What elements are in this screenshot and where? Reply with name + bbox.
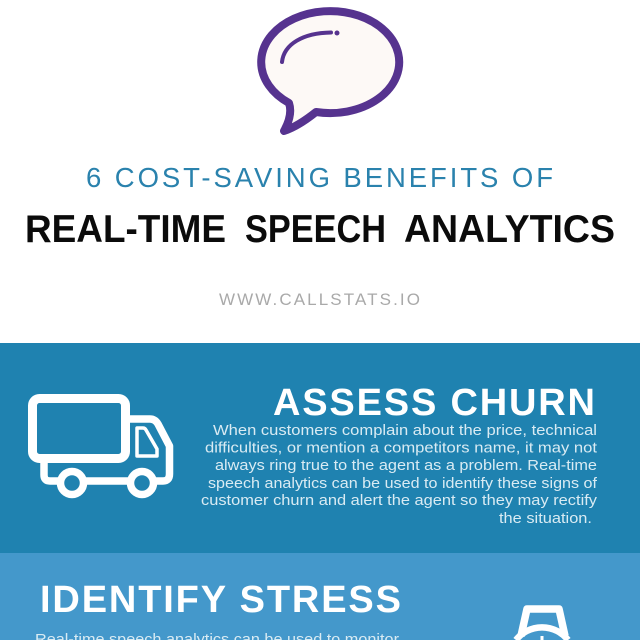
title line 2: REAL-TIME xyxy=(25,208,226,251)
heading: identify stress: IDENTIFY STRESS xyxy=(40,579,401,621)
website address: WWW.CALLSTATS.IO xyxy=(219,290,420,309)
text block: assess churn: When customers complain about the price, technical xyxy=(213,423,597,439)
icon: speech bubble xyxy=(261,11,399,131)
text block: assess churn: customer churn and alert the agent so they may rectify xyxy=(201,493,598,509)
text block: assess churn xyxy=(201,423,598,527)
title line 2 xyxy=(25,208,615,251)
panel: identify stress xyxy=(0,553,640,640)
text block: assess churn: speech analytics can be used to identify these signs of xyxy=(208,476,598,492)
panel: header xyxy=(0,0,640,343)
icon: stopwatch xyxy=(516,609,568,640)
panel: assess churn xyxy=(0,343,640,553)
icon: delivery truck xyxy=(32,398,170,494)
title line 1: 6 COST-SAVING BENEFITS OF xyxy=(86,162,553,193)
title line 2: SPEECH xyxy=(245,208,386,251)
heading: assess churn: ASSESS CHURN xyxy=(273,382,595,424)
text block: assess churn: the situation. xyxy=(499,511,592,527)
text block: assess churn: always ring true to the agent as a problem. Real-time xyxy=(215,458,597,474)
text block: assess churn: difficulties, or mention a competitors name, it may not xyxy=(205,440,597,456)
title line 2: ANALYTICS xyxy=(404,208,615,251)
